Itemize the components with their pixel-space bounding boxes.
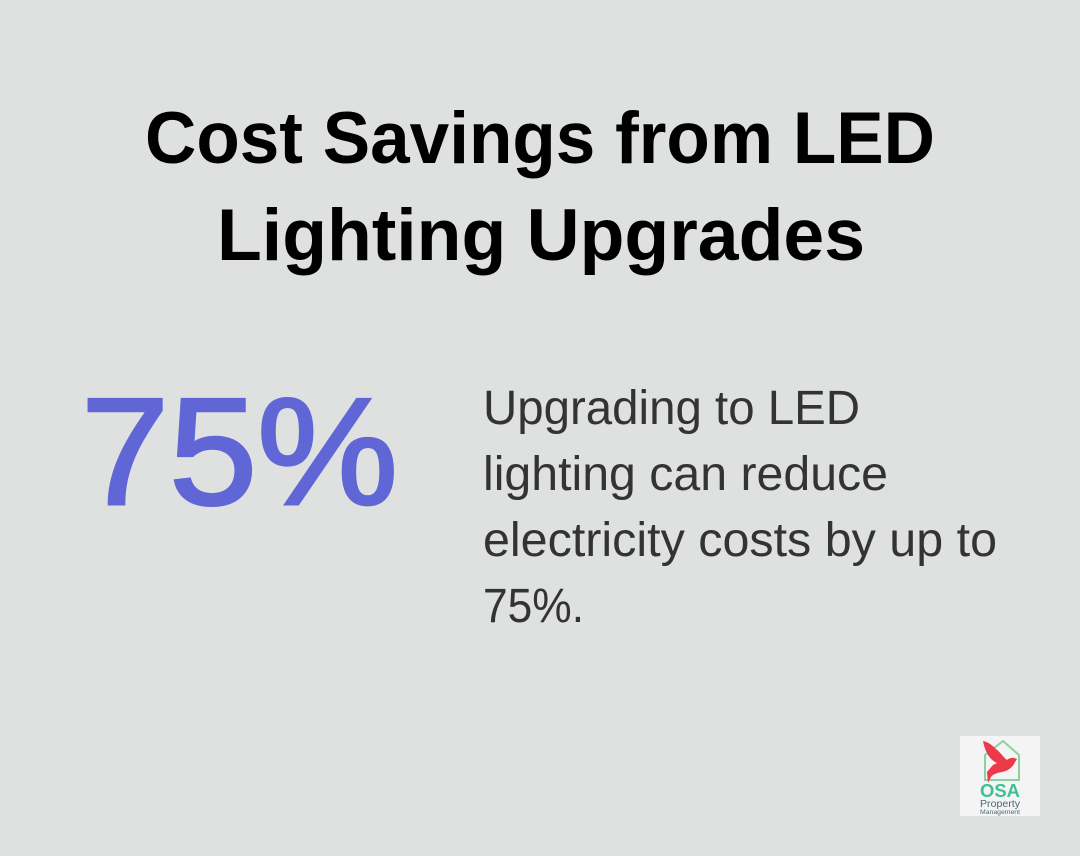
description text: electricity costs by up to	[483, 514, 997, 567]
big statistic: 75%: 75%	[81, 367, 398, 537]
description text: 75%.	[483, 580, 584, 633]
description text: lighting can reduce	[483, 448, 888, 501]
icon: red bird	[983, 741, 1017, 783]
title: Cost Savings from LED	[145, 98, 935, 179]
logo subtitle: Property	[980, 799, 1020, 810]
description text: Upgrading to LED	[483, 382, 860, 435]
title	[145, 98, 935, 276]
logo: OSA Property Management	[960, 736, 1040, 816]
logo subtitle 2: Management	[980, 810, 1020, 816]
title: Lighting Upgrades	[217, 195, 865, 276]
logo wordmark: OSA	[980, 781, 1020, 801]
description text	[483, 382, 997, 633]
icon: house outline	[985, 741, 1019, 780]
